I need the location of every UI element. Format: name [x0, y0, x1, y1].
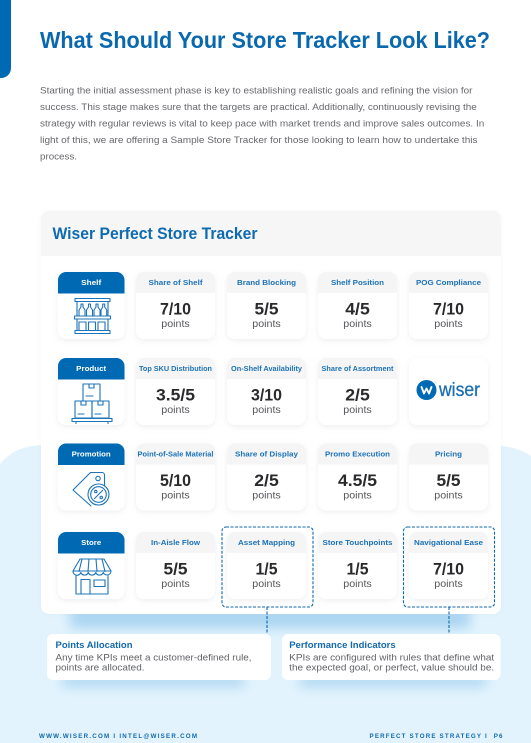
- KPI: Asset Mapping: 1/5: [256, 560, 278, 578]
- KPI: On-Shelf Availability: points: [252, 405, 281, 416]
- KPI: In-Aisle Flow: [136, 532, 215, 599]
- KPI: Share of Shelf: Share of Shelf: [148, 278, 203, 287]
- KPI: Asset Mapping: Asset Mapping: [238, 538, 295, 547]
- KPI: Asset Mapping: [227, 532, 306, 599]
- panel shadow: [70, 608, 470, 628]
- logo card: wiser: wiser: [438, 380, 481, 401]
- KPI: Pricing: [409, 444, 488, 510]
- KPI: Store Touchpoints: [318, 532, 397, 599]
- intro paragraph: strategy with regular reviews is vital to keep pace with market trends and improve sales outcomes. In: [40, 118, 484, 128]
- KPI: Share of Shelf: points: [161, 319, 190, 330]
- KPI: Promo Execution: 4.5/5: [338, 472, 377, 490]
- KPI: Store Touchpoints: points: [343, 579, 372, 590]
- panel: Wiser Perfect Store Tracker: [41, 211, 501, 614]
- KPI: POG Compliance: points: [434, 319, 463, 330]
- category: Promotion: [58, 444, 124, 510]
- callout: Points Allocation: Any time KPIs meet a customer-defined rule,: [56, 653, 252, 664]
- KPI: Shelf Position: [318, 272, 397, 339]
- KPI: Point-of-Sale Material: 5/10: [160, 472, 191, 490]
- callout: Performance Indicators: KPIs are configured with rules that define what: [289, 653, 495, 664]
- KPI: Point-of-Sale Material: points: [161, 490, 190, 502]
- intro paragraph: light of this, we are offering a Sample Store Tracker for those looking to learn how to undertake this: [40, 134, 478, 145]
- icon: stacked boxes: [72, 384, 112, 424]
- KPI: Promo Execution: points: [343, 490, 372, 502]
- KPI: POG Compliance: POG Compliance: [416, 278, 481, 287]
- intro paragraph: process.: [40, 150, 77, 162]
- KPI: Pricing: points: [434, 490, 463, 502]
- dashed highlight: Navigational Ease to Performance Indicators: [404, 527, 494, 633]
- KPI: Brand Blocking: Brand Blocking: [237, 278, 296, 287]
- footer: right page label: PERFECT STORE STRATEGY I P6: [370, 733, 503, 740]
- KPI: Share of Assortment: [318, 358, 397, 425]
- KPI: Share of Shelf: [136, 272, 215, 339]
- panel header: Wiser Perfect Store Tracker: [52, 225, 258, 243]
- KPI: Share of Assortment: Share of Assortment: [322, 364, 394, 373]
- category: Product: Product: [76, 364, 107, 373]
- KPI: Store Touchpoints: 1/5: [346, 560, 368, 578]
- KPI: Share of Shelf: 7/10: [160, 300, 191, 318]
- title: What Should Your Store Tracker Look Like?: [40, 27, 490, 53]
- KPI: Top SKU Distribution: points: [161, 405, 190, 416]
- KPI: Share of Display: Share of Display: [235, 450, 298, 458]
- KPI: On-Shelf Availability: 3/10: [251, 386, 282, 404]
- KPI: Navigational Ease: [409, 532, 488, 599]
- KPI: Shelf Position: Shelf Position: [331, 278, 384, 287]
- KPI: Share of Assortment: 2/5: [345, 386, 370, 404]
- KPI: Share of Display: [227, 444, 306, 510]
- panel header: [41, 211, 501, 256]
- KPI: Share of Display: points: [252, 490, 281, 502]
- KPI: In-Aisle Flow: points: [161, 579, 190, 590]
- KPI: Navigational Ease: 7/10: [433, 560, 464, 578]
- KPI: Pricing: Pricing: [435, 450, 462, 458]
- KPI: In-Aisle Flow: In-Aisle Flow: [151, 538, 200, 547]
- icon: shelf: [74, 298, 110, 334]
- KPI: Promo Execution: Promo Execution: [325, 450, 390, 458]
- KPI: Top SKU Distribution: Top SKU Distribution: [139, 364, 212, 373]
- callout: Performance Indicators: the expected goal, or perfect, value should be.: [289, 662, 494, 673]
- KPI: Store Touchpoints: Store Touchpoints: [322, 538, 393, 547]
- category: Store: [58, 532, 124, 599]
- KPI: POG Compliance: [409, 272, 488, 339]
- KPI: Brand Blocking: [227, 272, 306, 339]
- KPI: Navigational Ease: Navigational Ease: [414, 538, 483, 547]
- logo card: wiser: [409, 358, 488, 425]
- icon: storefront: [73, 559, 111, 594]
- callout: Points Allocation: [47, 634, 271, 680]
- KPI: On-Shelf Availability: On-Shelf Availability: [231, 364, 302, 373]
- KPI: Brand Blocking: 5/5: [254, 300, 278, 318]
- KPI: Brand Blocking: points: [252, 319, 281, 330]
- KPI: Top SKU Distribution: 3.5/5: [156, 386, 195, 404]
- intro paragraph: Starting the initial assessment phase is key to establishing realistic goals and refining the vision for: [40, 84, 472, 96]
- callout: Performance Indicators: Performance Indicators: [289, 640, 396, 651]
- KPI: Point-of-Sale Material: [136, 444, 215, 510]
- category: Product: [58, 358, 124, 425]
- intro paragraph: [40, 84, 484, 162]
- KPI: Asset Mapping: points: [252, 579, 281, 590]
- KPI: Promo Execution: [318, 444, 397, 510]
- KPI: POG Compliance: 7/10: [433, 300, 464, 318]
- KPI: Share of Display: 2/5: [254, 472, 279, 490]
- category: Shelf: Shelf: [81, 278, 102, 287]
- category: Promotion: Promotion: [72, 450, 111, 458]
- KPI: In-Aisle Flow: 5/5: [164, 560, 188, 578]
- category: Store: Store: [81, 538, 101, 547]
- corner tab: [0, 0, 11, 78]
- intro paragraph: success. This stage makes sure that the targets are practical. Additionally, continuously revising the: [40, 101, 477, 112]
- KPI: On-Shelf Availability: [227, 358, 306, 425]
- callout: Points Allocation: points are allocated.: [56, 662, 144, 673]
- KPI: Top SKU Distribution: [136, 358, 215, 425]
- KPI: Navigational Ease: points: [434, 579, 463, 590]
- callout shadows: [62, 676, 244, 686]
- KPI: Point-of-Sale Material: Point-of-Sale Material: [138, 450, 214, 458]
- category: Shelf: [58, 272, 124, 339]
- KPI: Shelf Position: points: [343, 319, 372, 330]
- callout: Performance Indicators: [282, 634, 500, 680]
- callout: Points Allocation: Points Allocation: [56, 640, 133, 651]
- KPI: Pricing: 5/5: [436, 472, 460, 490]
- KPI: Share of Assortment: points: [343, 405, 372, 416]
- dashed highlight: Asset Mapping to Points Allocation: [222, 527, 313, 633]
- KPI: Shelf Position: 4/5: [345, 300, 370, 318]
- icon: price tag: [73, 472, 109, 506]
- footer: left contact: WWW.WISER.COM I INTEL@WISER.COM: [39, 733, 197, 740]
- background: light blue shape: [0, 445, 531, 743]
